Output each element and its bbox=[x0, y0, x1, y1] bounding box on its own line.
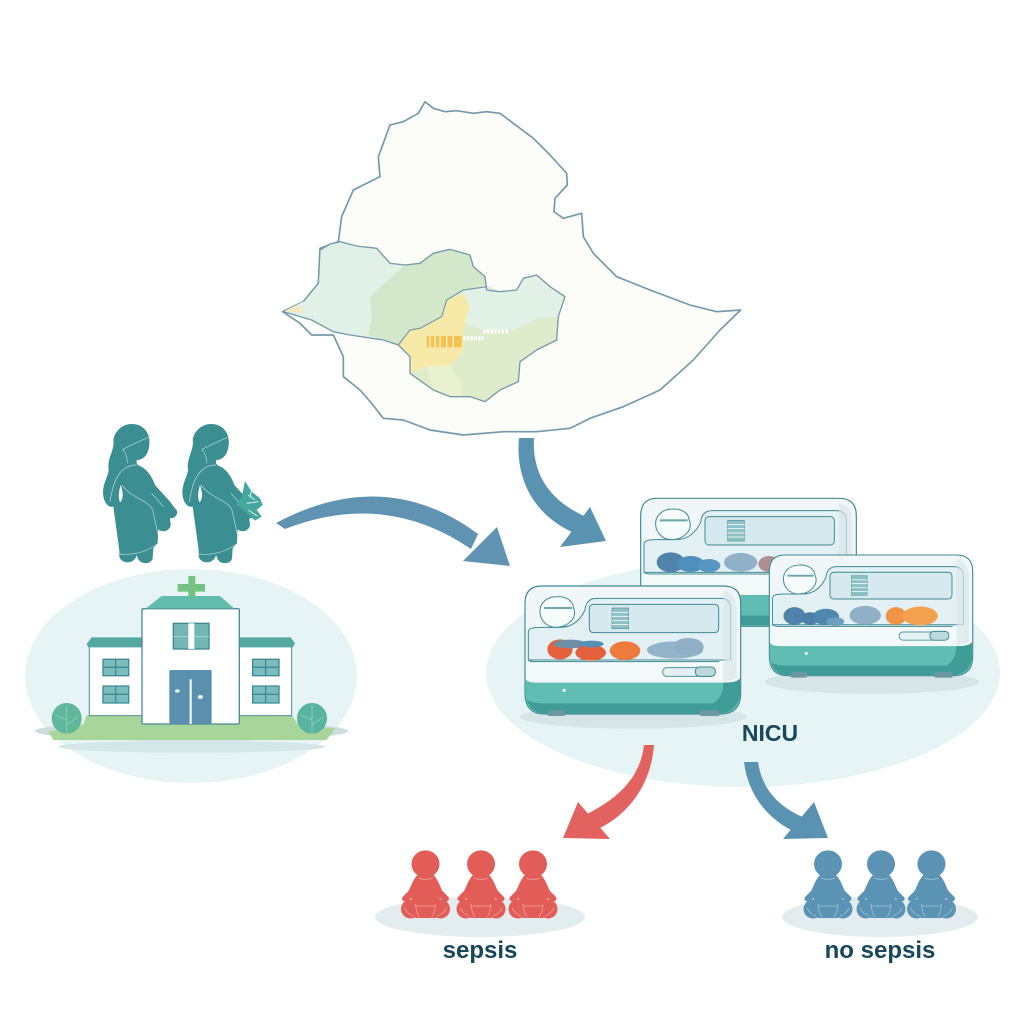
arrow: NICU to sepsis bbox=[563, 745, 654, 839]
label: sepsis: sepsis bbox=[443, 937, 517, 964]
map outline bbox=[283, 102, 741, 435]
arrow: women to NICU bbox=[276, 497, 510, 566]
map label marks bbox=[427, 332, 508, 347]
incubator: right bbox=[765, 555, 979, 694]
incubator: front bbox=[520, 586, 747, 729]
icon: woman 2 with bundle bbox=[182, 424, 263, 563]
panel: NICU background ellipse bbox=[486, 559, 1000, 787]
arrow: NICU to no sepsis bbox=[744, 762, 828, 839]
icon: woman 1 bbox=[103, 424, 177, 563]
group: sepsis babies bbox=[375, 850, 585, 937]
babies in front incubator bbox=[547, 638, 704, 661]
label: no sepsis: no sepsis bbox=[825, 937, 935, 964]
label: NICU: NICU bbox=[742, 720, 798, 746]
group: no sepsis babies bbox=[782, 850, 978, 937]
arrow: map to NICU bbox=[518, 438, 606, 547]
babies in right incubator bbox=[783, 606, 938, 626]
map: Ethiopia with highlighted regions bbox=[283, 102, 741, 435]
highlighted regions bbox=[283, 242, 565, 402]
panel: hospital background ellipse bbox=[25, 569, 357, 783]
incubator: back bbox=[641, 498, 856, 628]
babies in back incubator bbox=[657, 552, 780, 572]
icon: hospital building bbox=[35, 576, 348, 753]
